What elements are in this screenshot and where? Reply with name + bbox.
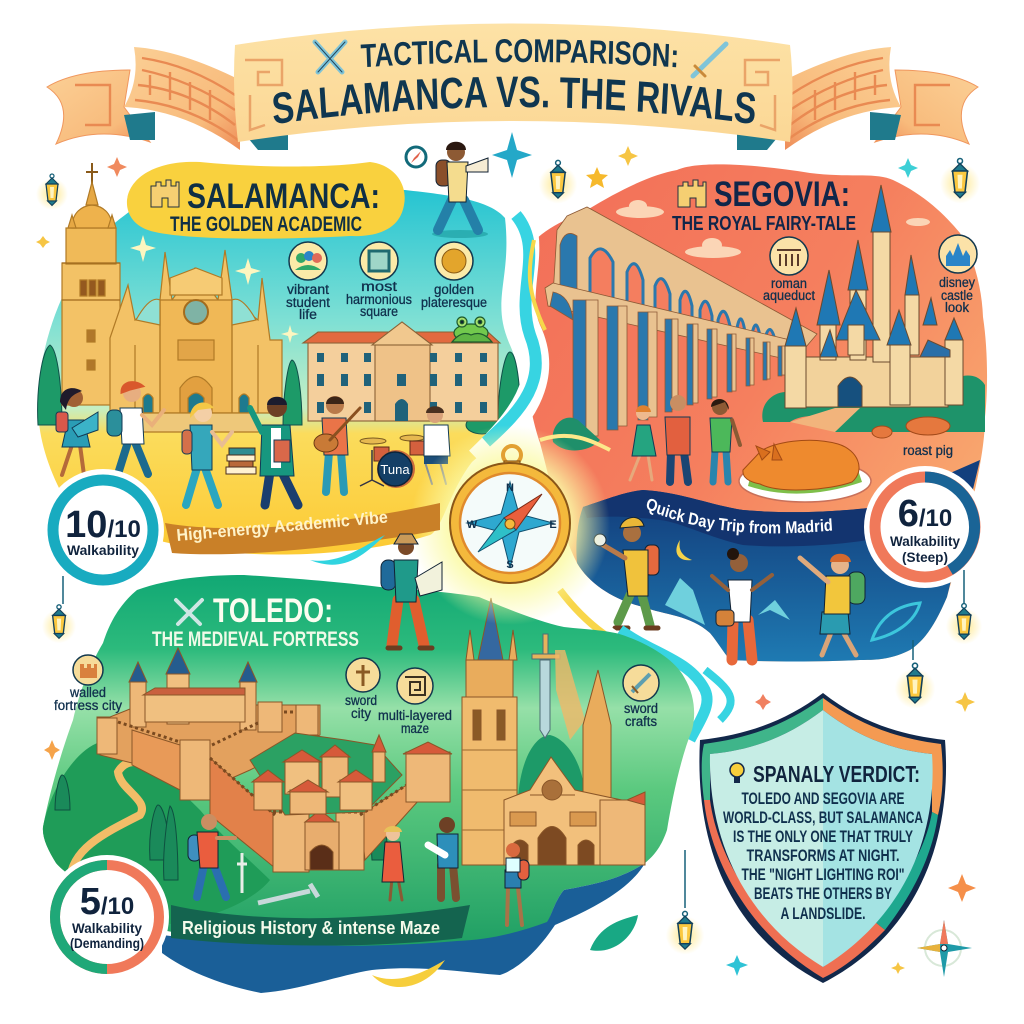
icon: teal swoosh xyxy=(310,535,385,565)
traveler boy xyxy=(800,554,865,655)
icon: light bulb xyxy=(730,763,744,783)
badge: Segovia walkability: (Steep) xyxy=(902,549,948,565)
badge: Salamanca walkability: 10/10 xyxy=(65,504,141,546)
banner left ribbon xyxy=(47,47,288,150)
badge: Toledo walkability: 5/10 xyxy=(80,881,134,923)
feature: sword crafts: sword xyxy=(624,701,658,716)
traveler with stopwatch xyxy=(594,517,659,628)
feature: sword crafts: crafts xyxy=(625,714,657,729)
verdict body: BEATS THE OTHERS BY xyxy=(754,884,892,903)
icon: giant sword xyxy=(532,634,560,738)
trees xyxy=(38,345,520,434)
cathedral xyxy=(462,598,645,865)
feature: disney castle look xyxy=(939,235,977,315)
drummer xyxy=(424,406,450,484)
feature: sword crafts xyxy=(623,665,659,729)
hill xyxy=(43,742,270,925)
icon: Tuna drum kit xyxy=(360,435,425,488)
hills xyxy=(762,375,985,432)
heading: Salamanca: SALAMANCA: xyxy=(187,177,380,216)
badge: Toledo walkability xyxy=(45,855,169,979)
feature: sword city: city xyxy=(351,706,371,721)
tourist man xyxy=(665,395,690,482)
icon: book stack xyxy=(226,448,256,474)
title line 1: TACTICAL COMPARISON: xyxy=(360,39,677,68)
feature: vibrant student life: student xyxy=(286,295,330,310)
feature: vibrant student life: vibrant xyxy=(287,282,329,297)
hiker red shirt xyxy=(188,814,235,897)
man with map xyxy=(428,817,458,898)
icon: teal blob xyxy=(590,915,638,951)
feature: multi-layered maze xyxy=(378,668,452,736)
icon: moon xyxy=(676,540,692,560)
tourist woman xyxy=(710,399,740,482)
icon: castle xyxy=(151,180,179,207)
icon: roast pig xyxy=(739,440,871,502)
badge: Salamanca walkability: Walkability xyxy=(67,542,139,558)
icon: sword xyxy=(693,44,726,76)
badge: Segovia walkability: 6/10 xyxy=(898,493,952,535)
feature: disney castle look: disney xyxy=(939,275,975,290)
feature: sword city xyxy=(345,658,380,721)
icon: small compass top xyxy=(406,147,426,167)
label: Toledo features xyxy=(54,655,659,736)
feature: sword city: sword xyxy=(345,693,377,708)
verdict body: TRANSFORMS AT NIGHT. xyxy=(746,846,900,865)
heading: Toledo: TOLEDO: xyxy=(213,592,333,630)
icon: compass star xyxy=(917,920,972,977)
callout: verdict shield xyxy=(699,693,946,983)
icon: frog xyxy=(452,317,492,342)
woman red dress xyxy=(382,826,404,900)
streams xyxy=(478,200,731,740)
icon: compass xyxy=(450,446,570,583)
icon: leaf xyxy=(872,603,920,640)
icon: compass: E xyxy=(549,519,557,531)
verdict body: TOLEDO AND SEGOVIA ARE xyxy=(742,789,904,808)
icon: Tuna drum kit: Tuna xyxy=(380,462,410,477)
tourist girl xyxy=(630,405,656,480)
feature: most harmonious square xyxy=(346,242,412,319)
icon: compass: S xyxy=(506,559,514,571)
label: Salamanca features xyxy=(286,242,487,322)
feature: roast pig: roast pig xyxy=(903,443,953,458)
village xyxy=(250,733,452,815)
ribbon: Toledo xyxy=(171,905,470,946)
feature: roman aqueduct xyxy=(763,237,815,303)
green hill behind cathedral xyxy=(518,735,585,800)
heading: Salamanca xyxy=(127,162,405,239)
path xyxy=(70,762,142,880)
verdict heading: SPANALY VERDICT: xyxy=(753,761,920,787)
cathedral tower xyxy=(62,163,120,405)
badge: Toledo walkability: (Demanding) xyxy=(70,935,144,951)
bush left of aqueduct xyxy=(553,418,600,450)
banner maze corners xyxy=(245,60,780,130)
icon: sword on ground xyxy=(258,884,318,903)
icon: yellow swoosh xyxy=(372,960,445,987)
heading: Salamanca: THE GOLDEN ACADEMIC xyxy=(170,213,362,236)
icon: sparkles xyxy=(36,132,976,976)
floating rock underside xyxy=(162,863,645,993)
trees xyxy=(55,775,620,880)
verdict body: A LANDSLIDE. xyxy=(780,904,866,923)
student in green jacket xyxy=(250,397,298,505)
feature: walled fortress city: fortress city xyxy=(54,698,122,713)
feature: walled fortress city xyxy=(54,655,122,713)
ribbon: Salamanca: High-energy Academic Vibe xyxy=(176,508,389,545)
feature: disney castle look: castle xyxy=(941,288,973,303)
icon: compass: W xyxy=(467,519,478,531)
feature: disney castle look: look xyxy=(945,300,969,315)
banner xyxy=(234,24,792,142)
feature: vibrant student life xyxy=(286,242,330,322)
ribbon: Salamanca xyxy=(165,503,440,554)
badge: Segovia walkability: Walkability xyxy=(890,533,960,549)
badge: Salamanca walkability xyxy=(42,469,164,591)
feature: most harmonious square: most xyxy=(361,279,397,294)
feature: golden plateresque xyxy=(421,242,487,310)
sparkles over sky xyxy=(130,235,299,343)
castle xyxy=(785,185,963,408)
feature: vibrant student life: life xyxy=(299,307,317,322)
icon: lanterns xyxy=(36,158,982,955)
label: Segovia features xyxy=(763,235,977,458)
icon: small standing sword xyxy=(237,853,247,893)
cathedral xyxy=(110,250,282,432)
navy ribbon band xyxy=(583,490,868,546)
badge: Toledo walkability: Walkability xyxy=(72,920,142,936)
feature: golden plateresque: plateresque xyxy=(421,295,487,310)
icon: crossed swords xyxy=(315,42,345,72)
panel: Salamanca xyxy=(38,163,520,555)
compass glow xyxy=(410,425,610,625)
ribbon: Toledo: Religious History & intense Maze xyxy=(182,918,440,938)
blue lower section xyxy=(576,460,980,662)
panel: Toledo xyxy=(43,575,694,993)
feature: walled fortress city: walled xyxy=(69,685,106,700)
feature: roman aqueduct: aqueduct xyxy=(763,288,815,303)
icon: ice mountains xyxy=(665,578,790,625)
verdict body: WORLD-CLASS, BUT SALAMANCA xyxy=(723,808,923,827)
feature: roman aqueduct: roman xyxy=(771,276,807,291)
feature: most harmonious square: harmonious xyxy=(346,292,412,307)
student with book xyxy=(56,388,98,475)
badge: Segovia walkability xyxy=(864,466,986,588)
title line 2: SALAMANCA VS. THE RIVALS xyxy=(273,76,756,124)
feature: golden plateresque: golden xyxy=(434,282,474,297)
heading: Segovia: THE ROYAL FAIRY-TALE xyxy=(672,213,856,235)
student with scroll xyxy=(107,383,164,474)
aqueduct xyxy=(545,207,817,444)
traveler with map above Toledo xyxy=(381,534,442,648)
icon: small pigs xyxy=(872,417,950,438)
icon: compass: N xyxy=(506,482,514,494)
musician with guitar xyxy=(314,396,360,492)
traveler top center xyxy=(432,142,488,238)
child hiker xyxy=(505,843,529,925)
feature: most harmonious square: square xyxy=(360,304,398,319)
student blonde xyxy=(182,403,232,505)
banner right ribbon xyxy=(737,47,978,150)
verdict body: THE "NIGHT LIGHTING ROI" xyxy=(742,865,904,884)
traveler woman xyxy=(712,548,772,660)
upper castle xyxy=(97,648,320,800)
town wall xyxy=(210,758,419,872)
heading: Segovia: SEGOVIA: xyxy=(714,175,850,214)
clouds xyxy=(616,200,930,258)
university building xyxy=(303,322,500,421)
feature: multi-layered maze: maze xyxy=(401,721,429,736)
heading: Toledo: THE MEDIEVAL FORTRESS xyxy=(152,628,359,651)
heading: Toledo xyxy=(152,592,359,651)
verdict body xyxy=(723,789,923,923)
feature: multi-layered maze: multi-layered xyxy=(378,708,452,723)
panel: Segovia xyxy=(520,164,987,662)
ribbon: Segovia: Quick Day Trip from Madrid xyxy=(646,498,832,536)
verdict body: IS THE ONLY ONE THAT TRULY xyxy=(733,827,913,846)
heading: Segovia xyxy=(672,175,856,235)
